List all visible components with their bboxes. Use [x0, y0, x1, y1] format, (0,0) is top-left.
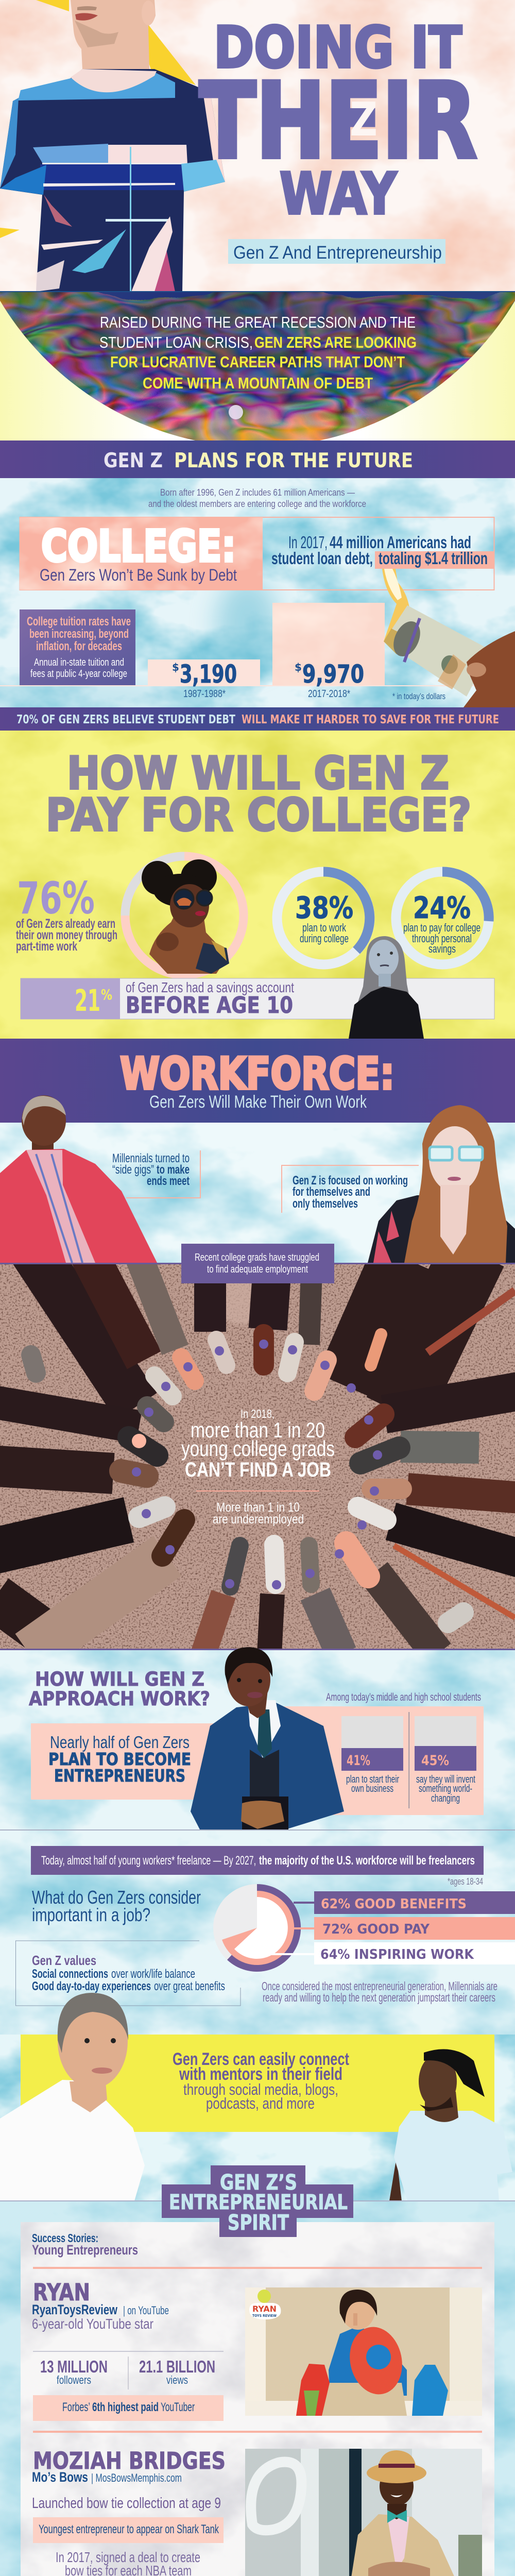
- logo: Ryan Toys Review: TOYS REVIEW: [252, 2314, 277, 2318]
- section banner: Gen Z plans for the future: GEN Z: [104, 449, 163, 472]
- students stats: changing: [431, 1793, 460, 1804]
- photo: man in patterned t-shirt: [0, 0, 225, 292]
- story: Ryan: | on YouTube: [123, 2304, 169, 2317]
- photo: man in blue suit: [191, 1647, 344, 1831]
- section banner: Gen Z plans for the future: [0, 440, 515, 478]
- story: Ryan: 13 MILLION: [40, 2357, 108, 2376]
- story: Ryan: Forbes’: [62, 2400, 90, 2414]
- values box: Good day-to-day experiences: [32, 1979, 151, 1993]
- students stats: own business: [351, 1783, 393, 1794]
- bar chart: tuition: 3,190: [180, 660, 237, 689]
- chart legend bars: 72% GOOD PAY: [322, 1922, 430, 1937]
- photo: girl: [349, 936, 424, 1039]
- stat text: can't find a job: more than 1 in 20: [191, 1418, 325, 1442]
- story: Moziah Bridges: Mo’s Bows: [32, 2469, 88, 2485]
- photo: man in white polo: [0, 1993, 145, 2201]
- savings callout: 21: [75, 983, 100, 1018]
- stat: 76%: of Gen Zers already earn: [16, 917, 115, 931]
- bar chart: tuition: 2017-2018*: [308, 688, 350, 700]
- savings callout: %: [101, 986, 112, 1003]
- intro text: GEN ZERS ARE LOOKING: [254, 333, 417, 351]
- photo panel: shoes in a circle: [0, 1247, 515, 1654]
- college heading box: [20, 517, 494, 590]
- question heading: What do Gen Zers consider: [32, 1887, 201, 1908]
- stick: [394, 1291, 515, 1618]
- intro text: COME WITH A MOUNTAIN OF DEBT: [143, 374, 373, 392]
- callout: recent grads: Recent college grads have struggled: [195, 1252, 319, 1263]
- title: Z: [350, 93, 377, 147]
- question heading: [32, 1887, 201, 1925]
- heading badge: GEN Z’S: [220, 2170, 297, 2195]
- callout: side gigs: [112, 1150, 200, 1198]
- section banner: workforce: WORKFORCE:: [120, 1048, 394, 1099]
- section banner: workforce: Gen Zers Will Make Their Own Work: [149, 1092, 367, 1112]
- intro text: and the oldest members are entering college and the workforce: [148, 499, 366, 509]
- savings callout: [21, 978, 494, 1019]
- heading badge: ENTREPRENEURIAL: [169, 2191, 348, 2214]
- intro text: [99, 313, 417, 392]
- bar chart: tuition: [0, 603, 515, 701]
- heading: HOW WILL GEN Z: [67, 747, 449, 800]
- bar chart: tuition: 9,970: [302, 660, 364, 689]
- mentors box: with mentors in their field: [179, 2064, 342, 2084]
- stat: 76%: [16, 873, 117, 954]
- callout: side gigs: “side gigs”: [112, 1163, 154, 1177]
- student debt stat: In 2017,: [288, 533, 328, 552]
- millennials note: [262, 1979, 497, 2004]
- stat: 76%: 76%: [17, 873, 95, 924]
- chart legend bars: 64% INSPIRING WORK: [320, 1947, 474, 1962]
- panel: intro bowl: [0, 291, 515, 446]
- story: Moziah Bridges: Launched bow tie collection at age 9: [32, 2495, 221, 2512]
- callout: recent grads: [0, 1244, 515, 1283]
- section banner: workforce: [0, 1039, 515, 1123]
- students stats: 41%: [347, 1753, 370, 1769]
- callout: working for themselves: [282, 1165, 419, 1213]
- panel: how will Gen Z approach work: [0, 1647, 515, 2035]
- banner: 70% of Gen Zers: 70% OF GEN ZERS BELIEVE STUDENT DEBT: [16, 713, 235, 726]
- panel: college: [0, 478, 515, 714]
- heading badge: [162, 2165, 353, 2237]
- callout: working for themselves: only themselves: [293, 1197, 358, 1211]
- story: Ryan: RyanToysReview: [32, 2302, 118, 2317]
- intro text: FOR LUCRATIVE CAREER PATHS THAT DON’T: [110, 353, 405, 371]
- values box: over work/life balance: [111, 1967, 195, 1981]
- chart legend bars: 62% GOOD BENEFITS: [321, 1896, 467, 1912]
- icon: burning hundred dollar bill: [382, 569, 515, 707]
- photo: woman with blue glasses: [368, 1105, 515, 1263]
- story: Moziah Bridges: Youngest entrepreneur to appear on Shark Tank: [39, 2522, 219, 2536]
- photo: man with black cap: [389, 2049, 512, 2201]
- story: Ryan: followers: [57, 2374, 91, 2386]
- chart: ring 38%: 38%: [295, 890, 353, 925]
- heading: APPROACH WORK?: [29, 1688, 210, 1710]
- tuition note: been increasing, beyond: [29, 627, 129, 641]
- chart: ring 38%: [277, 872, 370, 964]
- story: Ryan: RYAN: [33, 2279, 90, 2306]
- chart: ring 24%: [396, 872, 489, 964]
- success stories heading: [32, 2231, 482, 2269]
- chart: ring 24%: savings: [428, 942, 456, 955]
- story: Moziah Bridges: MOZIAH BRIDGES: [33, 2447, 226, 2475]
- callout: working for themselves: for themselves and: [293, 1185, 370, 1199]
- story: Ryan: [32, 2279, 224, 2421]
- shoes: [31, 1334, 464, 1623]
- heading: [46, 747, 471, 841]
- chart legend bars: [271, 1891, 515, 1964]
- chart: ring 24%: 24%: [413, 890, 471, 925]
- panel: millennials vs Gen Z: [0, 1095, 515, 1263]
- freelance banner: *ages 18-34: [448, 1876, 483, 1887]
- shoe dots: [132, 1340, 382, 1589]
- logo: Ryan Toys Review: RYAN: [252, 2304, 277, 2314]
- section banner: Gen Z plans for the future: PLANS FOR THE FUTURE: [174, 449, 413, 472]
- college heading box: COLLEGE:: [41, 521, 236, 572]
- intro text: Born after 1996, Gen Z includes 61 million Americans —: [160, 487, 355, 498]
- callout: side gigs: to make: [157, 1163, 190, 1177]
- students stats: 45%: [421, 1753, 449, 1769]
- college heading box: Gen Zers Won’t Be Sunk by Debt: [40, 566, 237, 584]
- bar chart: tuition: $: [172, 661, 179, 673]
- icon: yellow star shape behind man: [0, 0, 196, 238]
- photo: Moziah Bridges: [245, 2449, 482, 2576]
- banner: 70% of Gen Zers: [0, 707, 515, 731]
- student debt stat: [271, 533, 494, 569]
- chart: ring 24%: plan to pay for college: [403, 921, 480, 934]
- students stats: plan to start their: [346, 1774, 399, 1785]
- story: Ryan: 6th highest paid: [92, 2400, 159, 2414]
- tuition note: inflation, for decades: [36, 639, 122, 653]
- panel: hero: [0, 0, 515, 292]
- subtitle: Gen Z And Entrepreneurship: [233, 243, 442, 263]
- intro text: RAISED DURING THE GREAT RECESSION AND THE: [100, 313, 416, 331]
- story: Moziah Bridges: In 2017, signed a deal to create: [56, 2549, 200, 2565]
- values box: over great benefits: [154, 1979, 225, 1993]
- stat text: can't find a job: young college grads: [181, 1436, 335, 1461]
- story: Ryan: 6-year-old YouTube star: [32, 2316, 153, 2332]
- photo: Ryan with toys: [245, 2287, 482, 2416]
- bar chart: tuition: * in today’s dollars: [392, 691, 445, 701]
- trouser legs: [0, 1247, 515, 1654]
- story card background: [21, 2222, 494, 2576]
- students stats: say they will invent: [416, 1774, 475, 1785]
- heading: PAY FOR COLLEGE?: [46, 789, 471, 841]
- story: Ryan: YouTuber: [161, 2400, 195, 2414]
- callout: side gigs: Millennials turned to: [112, 1151, 190, 1165]
- entrepreneurs box: ENTREPRENEURS: [54, 1766, 185, 1786]
- intro text: [148, 487, 366, 509]
- story: Ryan: 21.1 BILLION: [139, 2357, 215, 2376]
- panel: how will Gen Z pay for college: [0, 731, 515, 1039]
- intro text: STUDENT LOAN CRISIS,: [99, 333, 253, 351]
- mentors box: Gen Zers can easily connect: [173, 2049, 349, 2069]
- mentors box: [21, 2035, 494, 2132]
- entrepreneurs box: [31, 1723, 237, 1800]
- tuition note: [20, 609, 135, 685]
- story: Moziah Bridges: [32, 2447, 226, 2576]
- title: [199, 14, 477, 228]
- heading badge: SPIRIT: [228, 2210, 289, 2235]
- chart: ring 38%: during college: [300, 932, 349, 945]
- heading: [29, 1668, 210, 1710]
- story: Ryan: views: [166, 2374, 188, 2386]
- bar chart: tuition: $: [295, 661, 302, 673]
- mentors box: through social media, blogs,: [183, 2080, 338, 2098]
- hand: [464, 631, 515, 707]
- student debt stat: student loan debt,: [271, 549, 373, 568]
- savings callout: BEFORE AGE 10: [126, 992, 293, 1019]
- values box: [15, 1941, 241, 2006]
- stat: 76%: their own money through: [16, 928, 117, 942]
- title: WAY: [280, 161, 397, 228]
- freelance banner: [31, 1846, 484, 1887]
- values box: Social connections: [32, 1967, 108, 1981]
- tuition note: fees at public 4-year college: [30, 668, 127, 680]
- chart: ring 76% with portrait: [125, 856, 244, 975]
- title: DOING IT: [214, 14, 462, 81]
- chart: ring 38%: plan to work: [302, 921, 347, 934]
- students stats: [282, 1691, 484, 1815]
- bar chart: tuition: 1987-1988*: [183, 688, 226, 700]
- stat text: can't find a job: are underemployed: [213, 1512, 304, 1527]
- panel: mentors and spirit background: [0, 1993, 515, 2241]
- chart: ring 24%: through personal: [412, 932, 472, 945]
- question heading: important in a job?: [32, 1904, 150, 1925]
- values box: Gen Z values: [32, 1953, 96, 1968]
- entrepreneurs box: PLAN TO BECOME: [48, 1749, 191, 1769]
- tuition note: Annual in-state tuition and: [34, 657, 124, 668]
- stat text: can't find a job: CAN’T FIND A JOB: [185, 1459, 331, 1481]
- logo: Ryan Toys Review: [249, 2290, 281, 2319]
- callout: working for themselves: Gen Z is focused on working: [293, 1174, 408, 1188]
- students stats: something world-: [419, 1783, 472, 1794]
- entrepreneurs box: Nearly half of Gen Zers: [50, 1733, 190, 1752]
- heading: HOW WILL GEN Z: [35, 1668, 204, 1690]
- callout: side gigs: ends meet: [147, 1174, 190, 1188]
- icon: psychedelic bubble: [0, 292, 515, 446]
- stat text: can't find a job: [181, 1407, 335, 1527]
- tuition note: College tuition rates have: [27, 615, 131, 629]
- photo: man in red blazer: [0, 1095, 157, 1263]
- story: Moziah Bridges: | MosBowsMemphis.com: [91, 2471, 182, 2484]
- stat text: can't find a job: More than 1 in 10: [216, 1500, 300, 1515]
- stat text: can't find a job: In 2018,: [241, 1407, 274, 1420]
- success stories heading: Young Entrepreneurs: [32, 2242, 138, 2258]
- panel: entrepreneurial spirit: [0, 2165, 515, 2576]
- mentors box: podcasts, and more: [206, 2094, 315, 2112]
- freelance banner: Today, almost half of young workers* freelance — By 2027,: [41, 1854, 256, 1868]
- callout: recent grads: to find adequate employment: [207, 1264, 308, 1275]
- savings callout: of Gen Zers had a savings account: [126, 979, 294, 995]
- chart: concentric pie: [213, 1884, 301, 1972]
- success stories heading: Success Stories:: [32, 2231, 98, 2245]
- stat: 76%: part-time work: [16, 939, 77, 954]
